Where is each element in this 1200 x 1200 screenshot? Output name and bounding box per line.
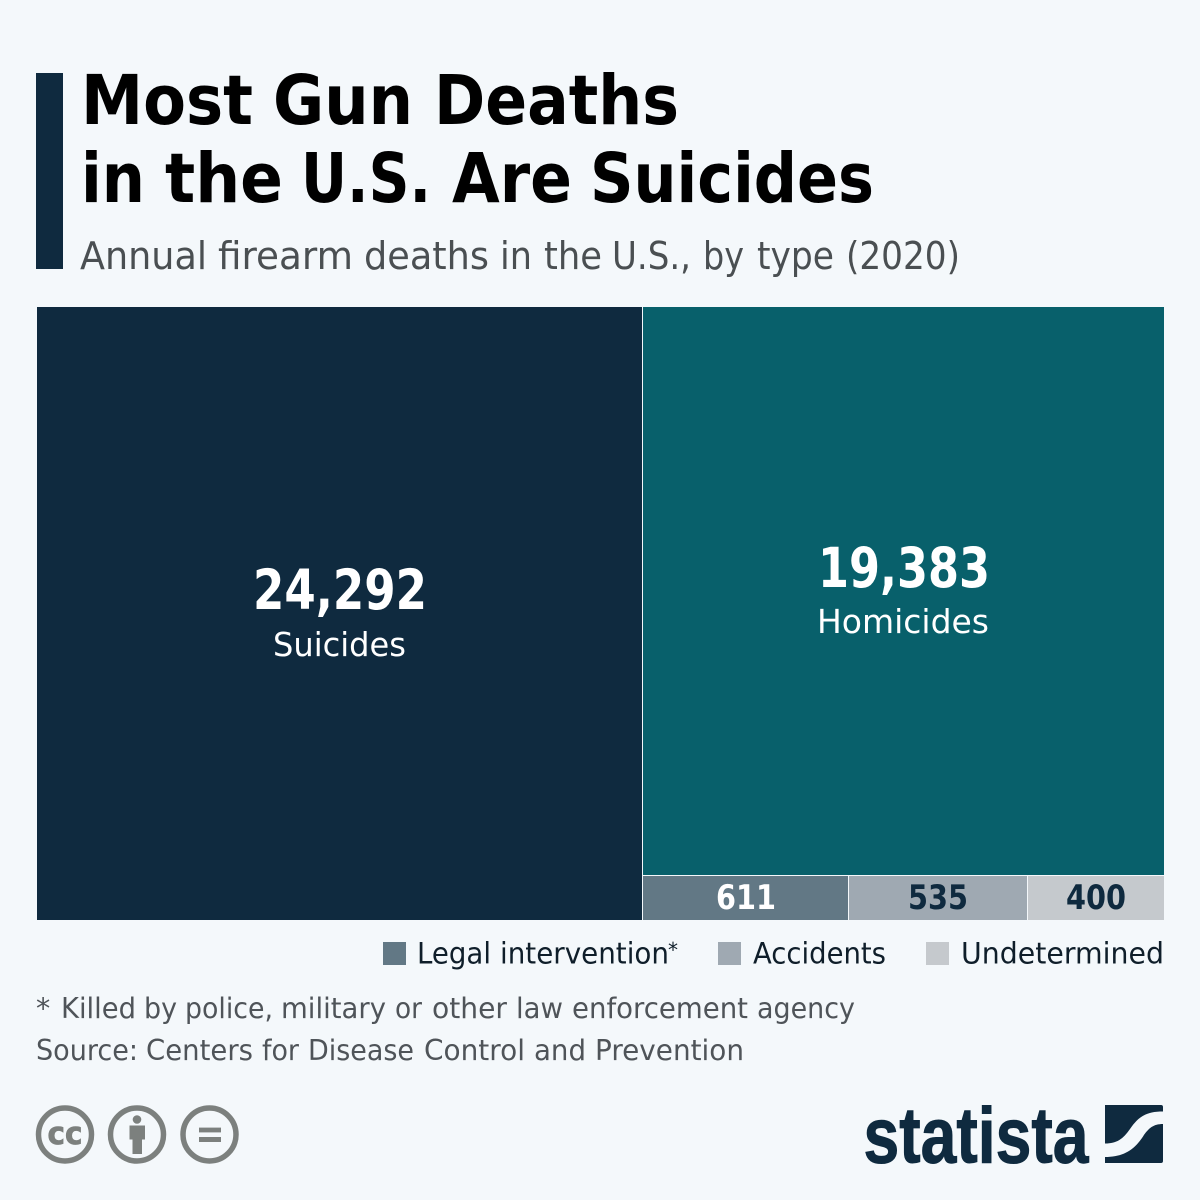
subtitle: (2020) — [846, 234, 960, 278]
panel: homicides — [643, 307, 1164, 875]
footnote: law — [516, 992, 563, 1025]
statista logo — [864, 1090, 1163, 1180]
subtitle: type — [757, 234, 834, 278]
subtitle: the — [544, 234, 602, 278]
icon: attribution — [110, 1108, 164, 1161]
source: Source: — [36, 1034, 138, 1067]
legend item: undetermined: Undetermined — [961, 936, 1164, 970]
source: for — [262, 1034, 299, 1067]
legend item: legal intervention: intervention — [500, 936, 669, 970]
panel: accidents: 535 — [908, 878, 968, 918]
panel: accidents — [849, 876, 1027, 920]
title: U.S. — [301, 139, 431, 219]
wordmark: statista — [864, 1090, 1089, 1180]
panel: homicides: Homicides — [817, 602, 989, 641]
title: Gun — [273, 61, 413, 141]
title: Deaths — [434, 61, 679, 141]
icon: no derivatives — [183, 1108, 236, 1161]
panel: suicides: Suicides — [273, 625, 406, 664]
title: the — [165, 139, 283, 219]
subtitle: in — [500, 234, 532, 278]
footnote: Killed — [61, 992, 136, 1025]
source: Disease — [308, 1034, 414, 1067]
legend item: legal intervention: * — [668, 938, 678, 962]
legend item: accidents: Accidents — [753, 936, 886, 970]
footnote: enforcement — [572, 992, 748, 1025]
subtitle: firearm — [218, 234, 353, 278]
legend — [383, 936, 1164, 970]
source: and — [534, 1034, 586, 1067]
title — [81, 61, 874, 219]
footnote: * — [36, 992, 50, 1025]
panel: legal intervention — [643, 876, 848, 920]
source: Prevention — [595, 1034, 744, 1067]
icon: creative commons: cc — [48, 1116, 82, 1152]
title accent bar — [36, 73, 63, 269]
title: Suicides — [590, 139, 874, 219]
footnote: agency — [757, 992, 855, 1025]
footnote: by — [144, 992, 177, 1025]
icon: creative commons — [38, 1108, 92, 1161]
panel: suicides — [37, 307, 642, 920]
title: Are — [452, 139, 572, 219]
legend item: legal intervention: Legal — [417, 936, 491, 970]
subtitle: by — [703, 234, 744, 278]
source: Centers — [146, 1034, 253, 1067]
legend item: legal intervention — [383, 936, 678, 970]
panel: legal intervention: 611 — [716, 878, 776, 918]
title: Most — [81, 61, 253, 141]
panel: suicides: 24,292 — [253, 558, 427, 622]
subtitle: deaths — [364, 234, 489, 278]
footnote — [36, 992, 855, 1025]
footnote: police, — [185, 992, 273, 1025]
panel: undetermined: 400 — [1066, 878, 1126, 918]
subtitle — [80, 234, 960, 278]
subtitle: Annual — [80, 234, 207, 278]
title: in — [81, 139, 145, 219]
panel: undetermined — [1028, 876, 1164, 920]
footnote: military — [281, 992, 386, 1025]
panel: homicides: 19,383 — [818, 536, 990, 600]
footnote: or — [395, 992, 422, 1025]
source — [36, 1034, 744, 1067]
logo mark — [1105, 1105, 1163, 1144]
source: Control — [424, 1034, 525, 1067]
subtitle: U.S., — [612, 234, 691, 278]
treemap chart — [37, 307, 1164, 920]
footnote: other — [432, 992, 507, 1025]
